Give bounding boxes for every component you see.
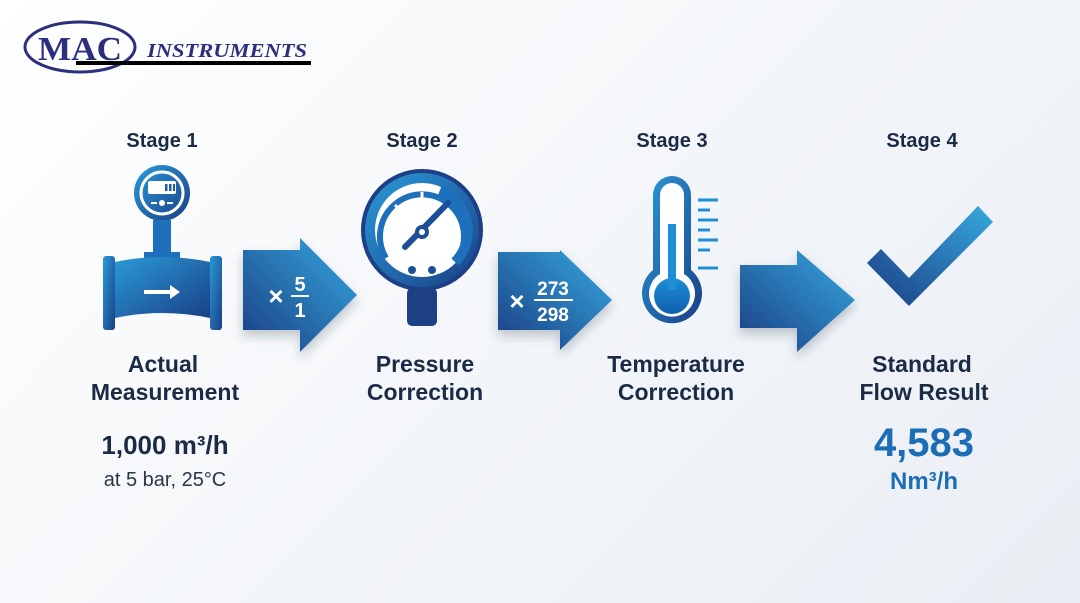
stage labels: Stage 2	[386, 130, 458, 152]
stage 3 text: Correction	[618, 379, 734, 405]
icon: thermometer	[642, 176, 718, 323]
stage labels	[126, 130, 958, 152]
stage 3 text	[607, 351, 745, 405]
arrow 3	[740, 250, 855, 352]
stage 2 text	[367, 351, 483, 405]
arrow 1: 5	[294, 274, 306, 296]
icon: pressure gauge	[361, 169, 483, 326]
stage labels: Stage 1	[126, 130, 198, 152]
stage 1 text: Measurement	[91, 379, 239, 405]
arrow 1	[243, 238, 357, 352]
stage labels: Stage 4	[886, 130, 958, 152]
stage 3 text: Temperature	[607, 351, 745, 377]
arrow 2	[498, 250, 612, 350]
arrow 1: ×	[268, 281, 284, 311]
stage 1 text	[91, 351, 239, 491]
stage 4 text: Flow Result	[859, 379, 989, 405]
logo	[25, 22, 311, 72]
stage 1 text: 1,000 m³/h	[101, 430, 229, 460]
arrow 2: 273	[537, 279, 569, 300]
stage 4 text: 4,583	[874, 421, 974, 465]
stage 4 text	[859, 351, 989, 495]
stage 4 text: Standard	[872, 351, 972, 377]
stage labels: Stage 3	[636, 130, 708, 152]
arrow 2: 298	[537, 305, 569, 326]
icon: checkmark	[867, 206, 993, 306]
logo: MAC	[38, 31, 122, 68]
icon: flow meter	[103, 165, 222, 330]
stage 2 text: Pressure	[376, 351, 474, 377]
logo: INSTRUMENTS	[146, 40, 307, 62]
stage 2 text: Correction	[367, 379, 483, 405]
stage 1 text: at 5 bar, 25°C	[104, 469, 226, 491]
arrow 2: ×	[509, 286, 525, 316]
arrow 1: 1	[294, 300, 306, 322]
stage 4 text: Nm³/h	[890, 468, 958, 495]
stage 1 text: Actual	[128, 351, 198, 377]
